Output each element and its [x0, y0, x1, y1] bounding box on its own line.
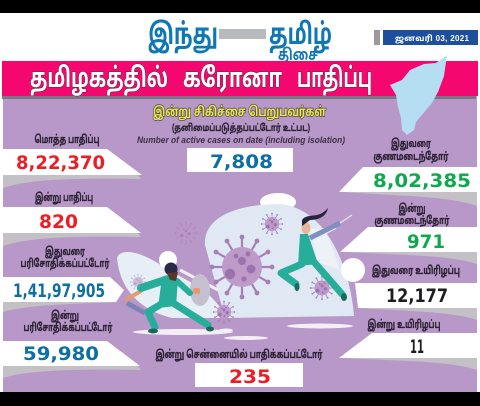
- left grey shadows: [3, 175, 141, 378]
- right grey shadows: [342, 192, 477, 370]
- panel: active cases: 7,808: [210, 151, 273, 173]
- masthead logo: தமிழ்: [269, 19, 332, 54]
- pale dome background: [205, 204, 354, 318]
- pale left blob: [117, 252, 230, 318]
- active heading: இன்று சிகிச்சை பெறுபவர்கள்: [153, 104, 327, 121]
- panel: total tested: [3, 246, 124, 302]
- white burst behind dome: [260, 193, 296, 211]
- panel: active cases: Number of active cases on date (including isolation): [137, 135, 345, 145]
- panel: total tested: பரிசோதிக்கப்பட்டோர்: [20, 257, 110, 271]
- small viruses: [130, 213, 334, 323]
- masthead logo: திசை: [278, 46, 318, 65]
- illustration: [117, 193, 365, 340]
- panel: today's cases: இன்று பாதிப்பு: [35, 192, 93, 205]
- title banner: [2, 61, 478, 99]
- panel: total recovered: குணமடைந்தோர்: [374, 150, 449, 164]
- panel: total recovered: [339, 138, 477, 192]
- panel: tested today: இன்று: [51, 310, 79, 323]
- title text: [30, 63, 372, 96]
- date badge: [374, 30, 478, 45]
- black bottom band: [0, 392, 480, 406]
- masthead logo: [148, 19, 332, 65]
- nurse figure right: [281, 208, 352, 301]
- panel: recovered today: [340, 203, 477, 253]
- panel: total deaths: [355, 265, 477, 308]
- central virus: [210, 235, 274, 299]
- panel: total tested: இதுவரை: [45, 246, 85, 259]
- panel: total cases: [3, 134, 142, 175]
- panel: total cases: 8,22,370: [16, 152, 105, 174]
- date badge: ஜனவரி 03, 2021: [395, 34, 470, 43]
- panel: tested today: பரிசோதிக்கப்பட்டோர்: [24, 321, 113, 335]
- panel: tested today: [3, 310, 140, 366]
- panel: active cases: (தனிமைப்படுத்தப்பட்டோர் உட்பட): [172, 122, 310, 135]
- panel: total cases: மொத்த பாதிப்பு: [34, 134, 100, 147]
- black top band: [0, 0, 480, 13]
- panel: Chennai cases: இன்று சென்னையில் பாதிக்கப்பட்டோர்: [156, 348, 323, 362]
- icon: Tamil Nadu map: [390, 55, 447, 135]
- panel: deaths today: 11: [410, 336, 424, 358]
- masthead logo: இந்து: [148, 19, 218, 54]
- panel: recovered today: 971: [407, 231, 445, 253]
- panel: today's cases: [3, 192, 141, 233]
- title text: பாதிப்பு: [297, 63, 372, 96]
- title text: தமிழகத்தில்: [30, 63, 168, 96]
- doctor figure left: [127, 262, 218, 334]
- panel: total tested: 1,41,97,905: [13, 280, 105, 302]
- panel: total deaths: 12,177: [386, 285, 448, 307]
- purple background panel: [3, 96, 477, 392]
- panel: active cases: [137, 104, 345, 173]
- ground shadows: [133, 324, 353, 340]
- panel: Chennai cases: [156, 348, 323, 388]
- white bursts: [159, 251, 365, 282]
- panel: today's cases: 820: [39, 211, 78, 233]
- panel: deaths today: [339, 319, 477, 358]
- panel: Chennai cases: 235: [229, 366, 271, 388]
- panel: total recovered: 8,02,385: [373, 170, 471, 192]
- panel: recovered today: இன்று: [398, 203, 426, 216]
- title text: கரோனா: [183, 63, 282, 93]
- panel: tested today: 59,980: [23, 343, 99, 365]
- panel: deaths today: இன்று உயிரிழப்பு: [368, 319, 440, 332]
- panel: total recovered: இதுவரை: [391, 138, 431, 151]
